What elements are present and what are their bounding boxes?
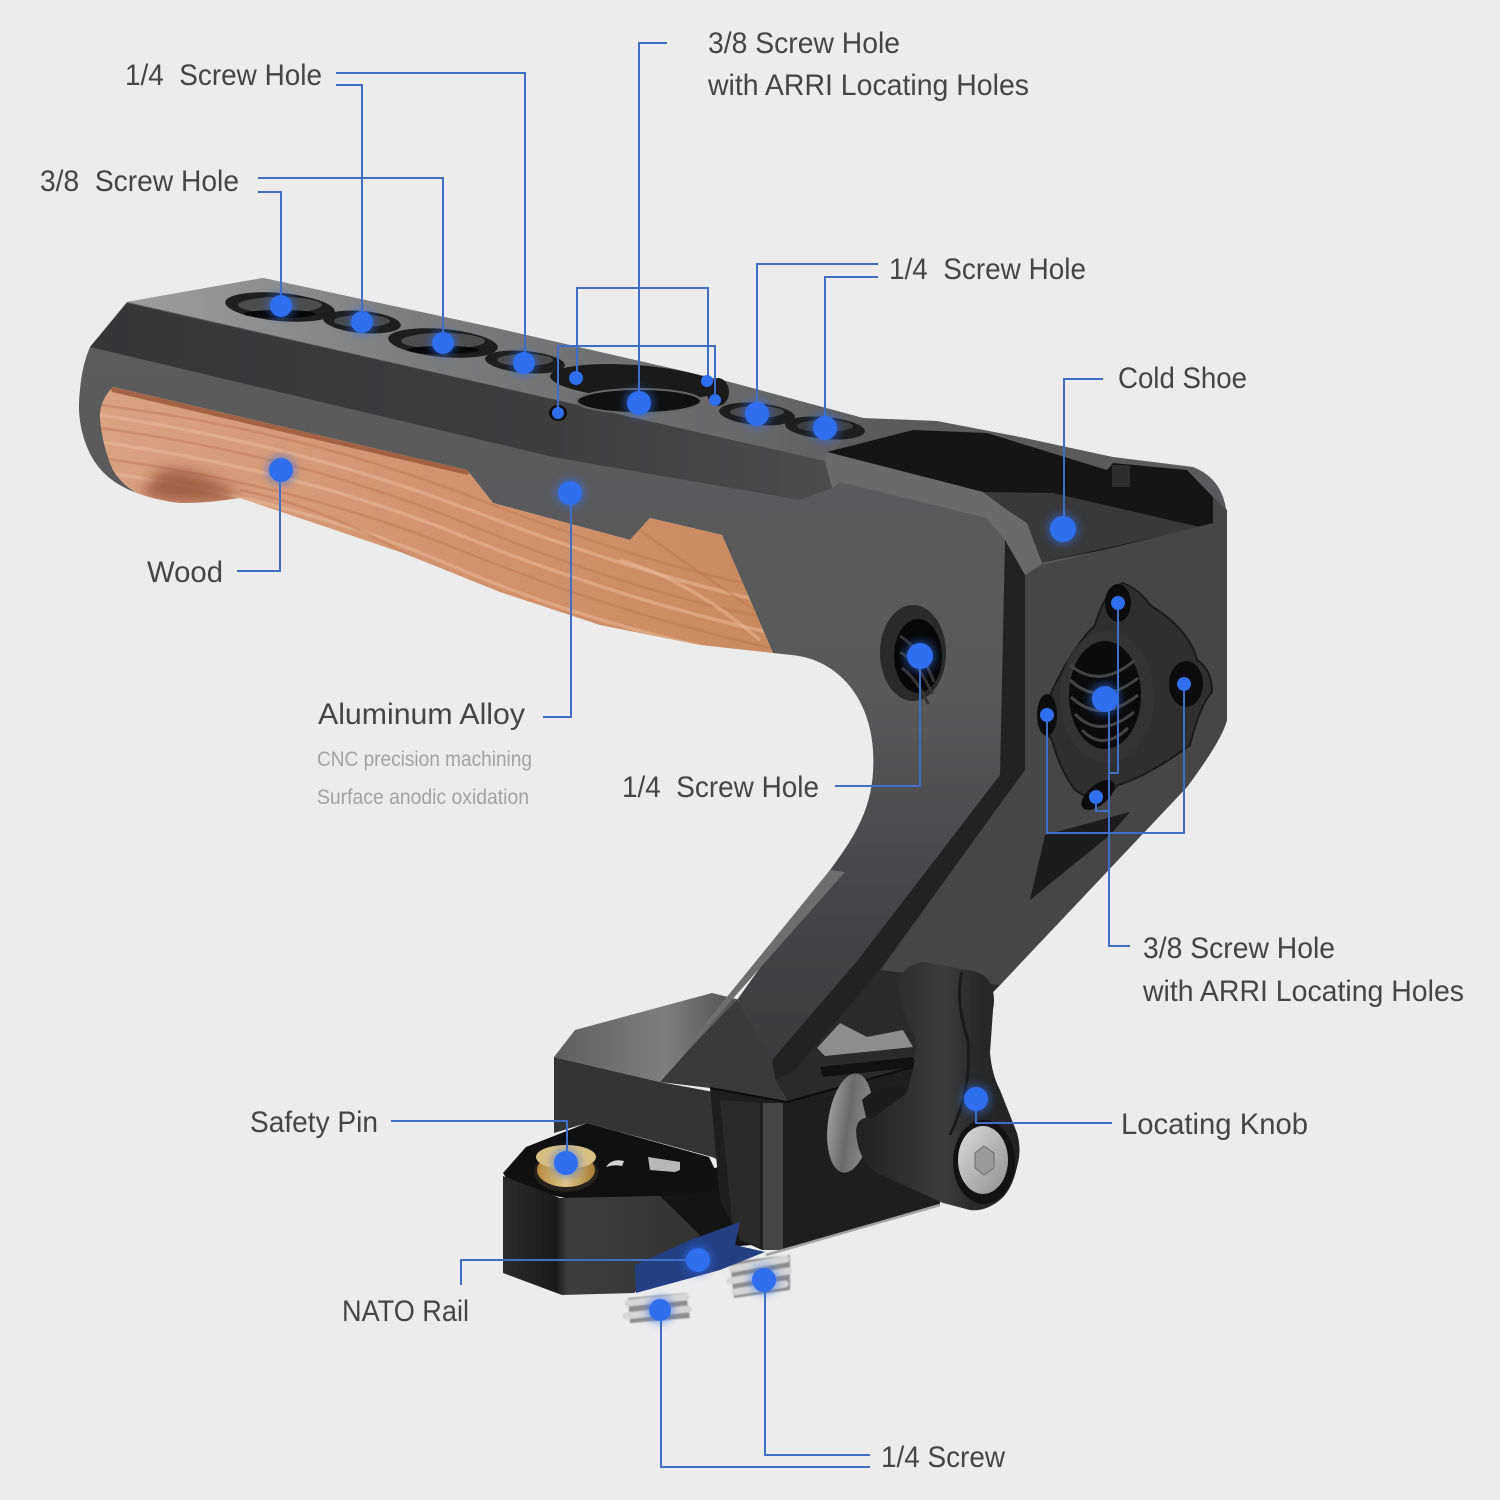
label: locating knob: Locating Knob: [1121, 1108, 1308, 1141]
label: aluminum alloy with notes: [317, 698, 532, 809]
label: wood: Wood: [147, 556, 223, 589]
quarter-inch screws: [626, 1255, 790, 1323]
label: safety pin: Safety Pin: [250, 1106, 378, 1139]
NATO rail: [635, 1222, 765, 1293]
wood grip: [100, 385, 780, 675]
label: 3/8 screw hole with ARRI, top: 3/8 Screw Hole: [708, 27, 900, 60]
label: aluminum alloy with notes: Aluminum Alloy: [318, 698, 525, 731]
main body: grip band and neck: [79, 278, 1227, 1093]
locating knob: [817, 962, 1020, 1210]
safety pin: [534, 1145, 680, 1192]
label: 3/8 screw hole with ARRI, top: with ARRI Locating Holes: [707, 69, 1029, 102]
lower mount block: [554, 870, 845, 1165]
top face with screw holes: [127, 278, 866, 461]
callout dots: [266, 292, 1191, 1324]
label: 3/8 screw hole with ARRI, right: [1142, 932, 1464, 1008]
light triangle and beam behind the knob: [817, 1023, 917, 1077]
label: 3/8 screw hole with ARRI, right: 3/8 Screw Hole: [1143, 932, 1335, 965]
cold shoe: [827, 430, 1213, 563]
top rim strip by the cold shoe: [825, 452, 1042, 575]
label: 3/8 screw hole with ARRI, top: [707, 27, 1029, 102]
label: 3/8 screw hole, left: 3/8 Screw Hole: [40, 165, 239, 198]
right side face: [854, 497, 1227, 1040]
leader lines: [237, 43, 1184, 1467]
screw hole row: [224, 288, 866, 442]
label: 1/4 screw hole, top left: 1/4 Screw Hole: [125, 59, 322, 92]
corner dark strip: [772, 540, 1025, 1080]
label: aluminum alloy with notes: Surface anodic oxidation: [317, 786, 529, 809]
front quarter-inch hole: [880, 605, 946, 704]
lower side shadow behind the knob: [775, 970, 1000, 1102]
label: aluminum alloy with notes: CNC precision machining: [317, 748, 532, 771]
lower body block: [710, 1067, 940, 1255]
label: 1/4 screw hole, centre: 1/4 Screw Hole: [622, 771, 819, 804]
knob pocket shadow: [862, 1086, 905, 1135]
label: NATO rail: NATO Rail: [342, 1295, 469, 1328]
knob bolt: [953, 1120, 1015, 1204]
label: 3/8 screw hole with ARRI, right: with ARRI Locating Holes: [1142, 975, 1464, 1008]
label: 1/4 screw hole, top right: 1/4 Screw Hole: [889, 253, 1086, 286]
label: 1/4 screw: 1/4 Screw: [881, 1441, 1005, 1474]
product: camera top handle: [79, 278, 1227, 1323]
NATO clamp: [503, 1123, 752, 1295]
dark band under the top face: [90, 303, 832, 500]
label: cold shoe: Cold Shoe: [1118, 362, 1247, 395]
knob washer: [821, 1070, 879, 1176]
side socket with ARRI locating holes: [1030, 583, 1212, 900]
